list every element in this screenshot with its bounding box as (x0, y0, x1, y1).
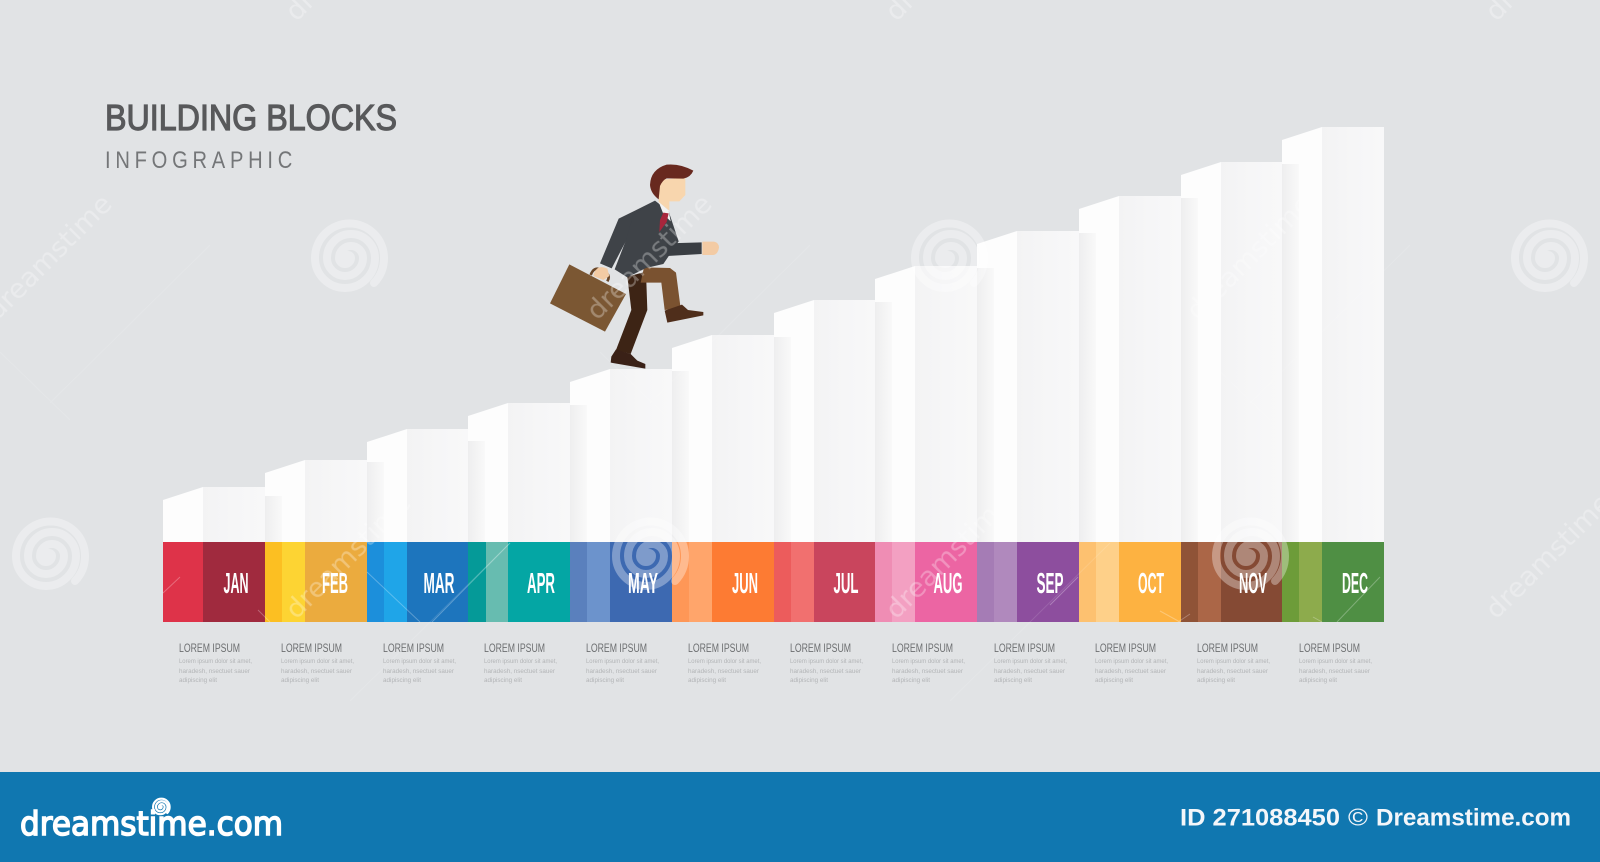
caption: August: haradesh, nsectuet sauer (892, 668, 964, 675)
month: March (367, 542, 468, 622)
caption: January: haradesh, nsectuet sauer (179, 668, 251, 675)
icon: front shoe (665, 305, 703, 323)
caption: March: adipiscing elit (383, 677, 421, 684)
caption: December: haradesh, nsectuet sauer (1299, 668, 1371, 675)
footer image id: © (1348, 804, 1368, 832)
footer logo: dreamstime.com (20, 804, 283, 843)
block: December (1282, 127, 1384, 542)
month: February (265, 542, 367, 622)
icon: front leg (641, 267, 681, 310)
block: July (774, 300, 875, 542)
month colour band (163, 542, 1384, 622)
caption: November: LOREM IPSUM (1197, 643, 1258, 655)
caption: December (1299, 643, 1372, 684)
caption: May: Lorem ipsum dolor sit amet, (586, 658, 659, 665)
caption: March: LOREM IPSUM (383, 643, 444, 655)
title: BUILDING BLOCKS (105, 97, 397, 138)
caption: June (688, 643, 761, 684)
caption: November: Lorem ipsum dolor sit amet, (1197, 658, 1270, 665)
caption: January: adipiscing elit (179, 677, 217, 684)
block: August (875, 266, 977, 542)
month: July: JUL (834, 568, 858, 600)
caption: December: LOREM IPSUM (1299, 643, 1360, 655)
caption: April (484, 643, 557, 684)
month captions (179, 643, 1372, 684)
caption: February: adipiscing elit (281, 677, 319, 684)
month: February: FEB (322, 568, 348, 600)
block: November (1181, 162, 1282, 542)
caption: October: LOREM IPSUM (1095, 643, 1156, 655)
watermark text: dreamstime (279, 487, 417, 625)
caption: October: Lorem ipsum dolor sit amet, (1095, 658, 1168, 665)
caption: September (994, 643, 1067, 684)
caption: July: adipiscing elit (790, 677, 828, 684)
month: January: JAN (224, 568, 248, 600)
icon: back shoe (611, 349, 645, 369)
watermark text: dreamstime (1180, 188, 1318, 326)
icon: back leg (616, 272, 647, 354)
month: August (875, 542, 977, 622)
caption: August: adipiscing elit (892, 677, 930, 684)
month: December (1282, 542, 1384, 622)
block: April (468, 403, 570, 542)
caption: January (179, 643, 252, 684)
caption: May (586, 643, 659, 684)
caption: February: Lorem ipsum dolor sit amet, (281, 658, 354, 665)
caption: November: haradesh, nsectuet sauer (1197, 668, 1269, 675)
caption: June: haradesh, nsectuet sauer (688, 668, 760, 675)
block: February (265, 460, 367, 542)
caption: April: Lorem ipsum dolor sit amet, (484, 658, 557, 665)
month: January (163, 542, 265, 622)
staircase chart of white blocks (163, 127, 1384, 542)
caption: August (892, 643, 965, 684)
caption: March: Lorem ipsum dolor sit amet, (383, 658, 456, 665)
caption: February: LOREM IPSUM (281, 643, 342, 655)
month: June (672, 542, 774, 622)
caption: November (1197, 643, 1270, 684)
caption: November: adipiscing elit (1197, 677, 1235, 684)
icon: logo spiral (153, 799, 170, 814)
watermark text (0, 0, 1600, 625)
caption: February: haradesh, nsectuet sauer (281, 668, 353, 675)
month: November (1181, 542, 1282, 622)
month: September: SEP (1036, 568, 1064, 600)
icon: back arm (600, 201, 655, 268)
icon: neck and face (659, 177, 685, 211)
title (105, 97, 397, 173)
month: December: DEC (1342, 568, 1368, 600)
watermark diagonal lines (0, 245, 1410, 701)
block: May (570, 369, 672, 542)
caption: April: haradesh, nsectuet sauer (484, 668, 556, 675)
caption: December: adipiscing elit (1299, 677, 1337, 684)
footer bar (0, 772, 1600, 862)
month: September (977, 542, 1079, 622)
month: May: MAY (628, 568, 658, 600)
icon: briefcase (550, 264, 626, 332)
footer image id: Dreamstime.com (1376, 804, 1571, 832)
caption: September: adipiscing elit (994, 677, 1032, 684)
caption: January: Lorem ipsum dolor sit amet, (179, 658, 252, 665)
block: January (163, 487, 265, 542)
caption: June: LOREM IPSUM (688, 643, 749, 655)
caption: August: Lorem ipsum dolor sit amet, (892, 658, 965, 665)
month: July (774, 542, 875, 622)
month: October (1079, 542, 1181, 622)
month: April: APR (527, 568, 555, 600)
caption: March (383, 643, 456, 684)
month: April (468, 542, 570, 622)
subtitle: INFOGRAPHIC (105, 146, 292, 173)
caption: October (1095, 643, 1168, 684)
caption: April: LOREM IPSUM (484, 643, 545, 655)
icon: fist (702, 242, 719, 255)
icon: collar and tie (659, 202, 671, 232)
caption: March: haradesh, nsectuet sauer (383, 668, 455, 675)
month: June: JUN (732, 568, 758, 600)
icon: hair (650, 164, 693, 199)
caption: May: haradesh, nsectuet sauer (586, 668, 658, 675)
caption: July: LOREM IPSUM (790, 643, 851, 655)
caption: September: LOREM IPSUM (994, 643, 1055, 655)
block: September (977, 231, 1079, 542)
month: November: NOV (1239, 568, 1267, 600)
caption: October: adipiscing elit (1095, 677, 1133, 684)
caption: July: Lorem ipsum dolor sit amet, (790, 658, 863, 665)
footer image id: ID 271088450 (1180, 804, 1340, 832)
watermark text: dreamstime (879, 487, 1017, 625)
businessman climbing the blocks (550, 164, 719, 369)
caption: September: Lorem ipsum dolor sit amet, (994, 658, 1067, 665)
month: May (570, 542, 672, 622)
caption: December: Lorem ipsum dolor sit amet, (1299, 658, 1372, 665)
caption: July (790, 643, 863, 684)
caption: October: haradesh, nsectuet sauer (1095, 668, 1167, 675)
month: October: OCT (1138, 568, 1164, 600)
caption: May: LOREM IPSUM (586, 643, 647, 655)
footer image id (1180, 804, 1571, 832)
caption: June: adipiscing elit (688, 677, 726, 684)
block: March (367, 429, 468, 542)
caption: June: Lorem ipsum dolor sit amet, (688, 658, 761, 665)
month: August: AUG (934, 568, 962, 600)
caption: February (281, 643, 354, 684)
icon: jacket (615, 201, 679, 277)
caption: January: LOREM IPSUM (179, 643, 240, 655)
caption: April: adipiscing elit (484, 677, 522, 684)
block: June (672, 335, 774, 542)
caption: August: LOREM IPSUM (892, 643, 953, 655)
caption: September: haradesh, nsectuet sauer (994, 668, 1066, 675)
watermark spirals (16, 224, 1584, 586)
watermark text: dreamstime (580, 188, 718, 326)
caption: May: adipiscing elit (586, 677, 624, 684)
caption: July: haradesh, nsectuet sauer (790, 668, 862, 675)
block: October (1079, 196, 1181, 542)
icon: front arm (667, 242, 702, 256)
month: March: MAR (424, 568, 455, 600)
